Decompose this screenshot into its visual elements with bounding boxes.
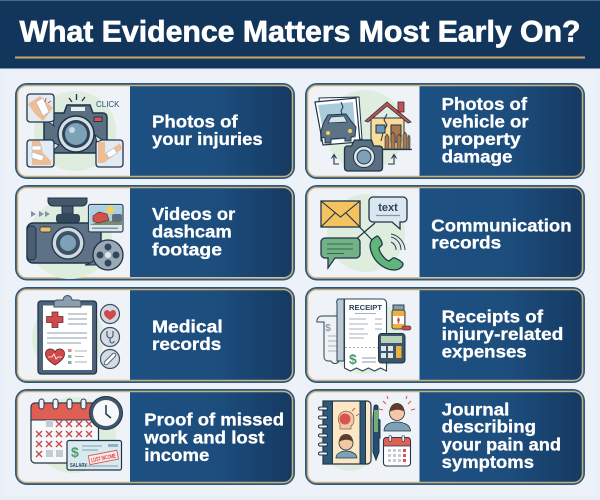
label: Proof of missed <box>144 410 284 430</box>
label: damage <box>442 146 513 166</box>
label: work and lost <box>143 427 264 447</box>
label: expenses <box>442 342 527 362</box>
label: describing <box>442 417 536 437</box>
panel: videos or dashcam footage <box>15 185 295 280</box>
label: footage <box>152 239 222 259</box>
label: Receipts of <box>442 306 543 326</box>
label: vehicle or <box>442 111 529 131</box>
panel: journal describing pain and symptoms <box>305 389 585 485</box>
label: Medical <box>152 317 223 337</box>
label: your injuries <box>152 129 263 149</box>
label: symptoms <box>442 452 534 472</box>
icon: envelope, text bubbles and phone <box>321 194 407 272</box>
icon: receipt, medicine and calculator: $ <box>325 323 331 334</box>
label <box>152 204 235 259</box>
icon: pain journal, pen, person and calendar <box>318 396 415 471</box>
panel: photos of vehicle or property damage <box>305 83 585 179</box>
label: Communication <box>431 215 572 235</box>
panel: photos of your injuries <box>15 83 295 179</box>
icon: envelope, text bubbles and phone: text <box>378 202 398 214</box>
icon: receipt, medicine and calculator <box>317 298 411 374</box>
header banner <box>0 0 600 68</box>
icon: calendar, clock and paycheck: SALARY <box>70 463 87 469</box>
icon: dashcam and film reel <box>27 198 123 279</box>
label: Videos or <box>152 204 235 224</box>
label <box>431 215 572 252</box>
label: Journal <box>442 399 509 419</box>
label: Photos of <box>442 94 527 114</box>
icon: clipboard with medical chart <box>32 296 120 375</box>
label <box>442 306 563 362</box>
label <box>442 94 529 166</box>
icon: calendar, clock and paycheck <box>31 396 122 473</box>
icon: camera with injury photos <box>27 91 123 171</box>
label: Photos of <box>152 111 238 131</box>
label: records <box>152 334 222 354</box>
label <box>152 317 223 354</box>
panel: communication records <box>305 185 585 280</box>
label: injury-related <box>442 324 563 344</box>
icon: calendar, clock and paycheck: $ <box>71 444 79 460</box>
icon: receipt, medicine and calculator: RECEIPT <box>349 303 382 312</box>
label: dashcam <box>152 222 232 242</box>
icon: receipt, medicine and calculator: $ <box>349 351 357 367</box>
label: your pain and <box>442 434 561 454</box>
icon: camera with injury photos: CLICK <box>96 99 120 109</box>
icon: damaged car photo, house and camera <box>315 90 412 171</box>
icon: calendar, clock and paycheck: LOST INCOME <box>91 454 117 464</box>
panel: receipts of injury-related expenses <box>305 287 585 383</box>
label <box>143 410 284 465</box>
panel: medical records <box>15 287 295 383</box>
label: property <box>442 129 521 149</box>
title: What Evidence Matters Most Early On? <box>20 16 580 48</box>
label: income <box>144 445 210 465</box>
label <box>152 111 263 149</box>
label: records <box>431 232 502 252</box>
label <box>442 399 561 472</box>
panel: proof of missed work <box>15 389 295 485</box>
